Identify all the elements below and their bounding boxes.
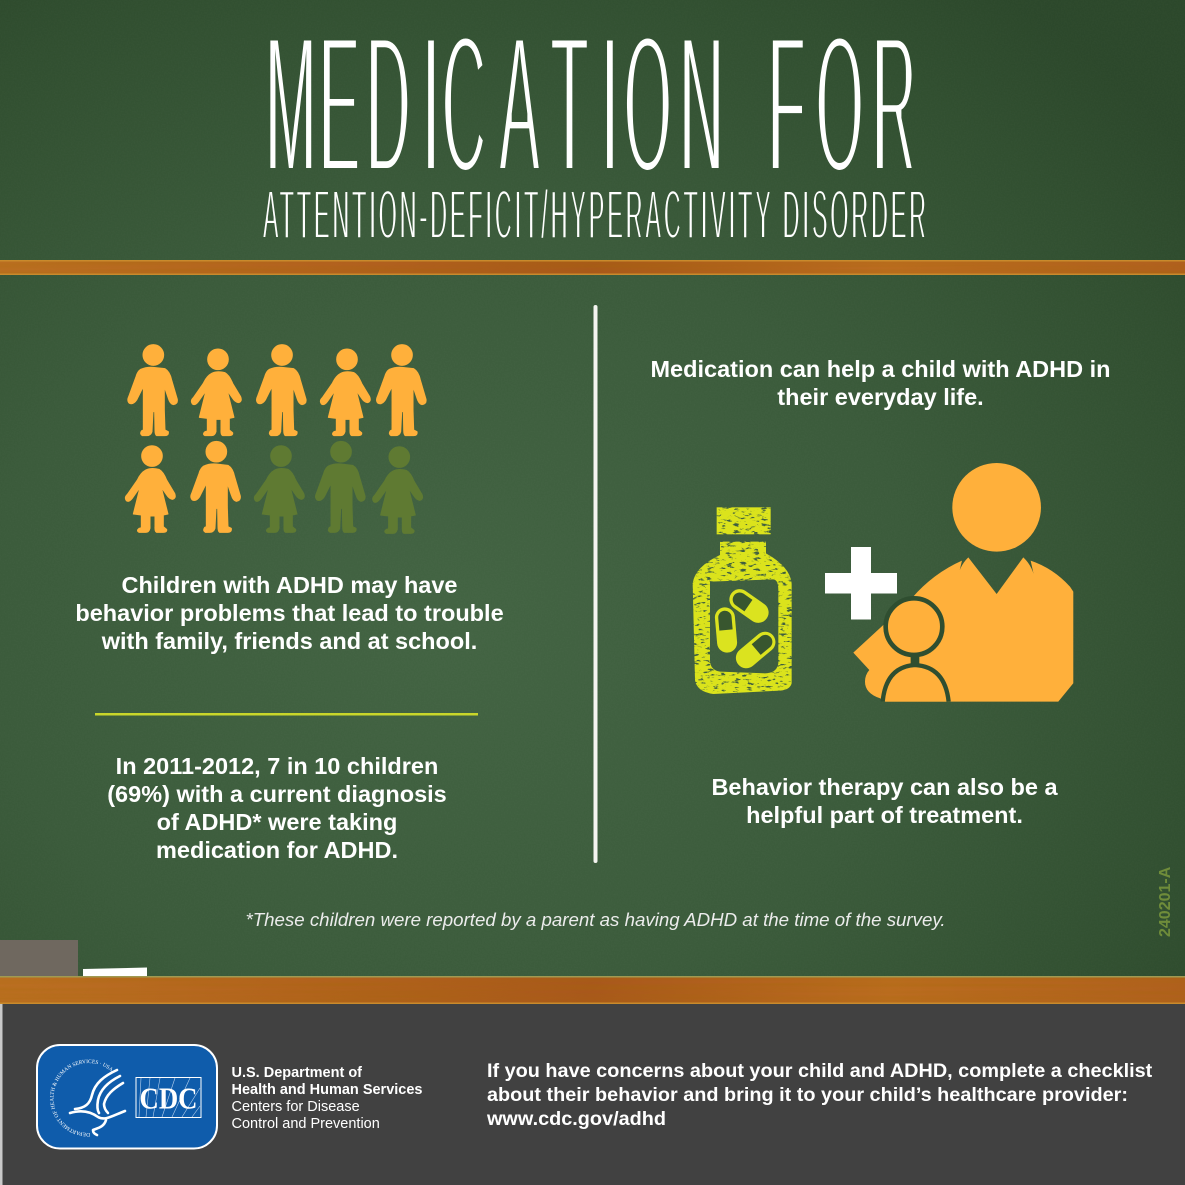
yellow divider	[95, 713, 478, 716]
child 3	[257, 345, 306, 436]
vertical chalk divider	[594, 305, 598, 863]
text: statistic: (69%) with a current diagnosis	[107, 781, 447, 807]
agency name: U.S. Department of	[232, 1065, 362, 1081]
text: behavior problems: Children with ADHD may have	[121, 572, 458, 598]
footer band	[0, 1004, 1185, 1185]
icon: adult with child	[853, 463, 1073, 702]
text: statistic: In 2011-2012, 7 in 10 children	[116, 753, 438, 779]
pill 3	[732, 627, 780, 672]
text: medication can help: their everyday life.	[777, 384, 984, 410]
icon group: ten children, seven highlighted	[125, 345, 426, 533]
child 7	[191, 441, 240, 532]
chalk stick	[83, 968, 147, 977]
subtitle: ATTENTION-DEFICIT/HYPERACTIVITY DISORDER	[263, 177, 926, 255]
text: medication can help: Medication can help a child with ADHD in	[650, 356, 1111, 382]
child 10 dimmed	[373, 447, 423, 533]
call to action: If you have concerns about your child and ADHD, complete a checklist	[487, 1060, 1153, 1082]
icon: plus sign	[825, 547, 897, 620]
text: statistic: medication for ADHD.	[156, 837, 398, 863]
text: behavior problems: with family, friends and at school.	[101, 628, 477, 654]
text: behavior problems: behavior problems that lead to trouble	[75, 600, 504, 626]
icon: pill bottle	[693, 507, 792, 694]
upper wood rail	[0, 260, 1185, 275]
child 2	[191, 349, 241, 436]
text: behavior therapy: helpful part of treatment.	[746, 802, 1023, 828]
seal ring text: DEPARTMENT OF HEALTH & HUMAN SERVICES · USA	[50, 1060, 112, 1137]
child 8 dimmed	[254, 446, 304, 532]
title: MEDICATION FOR	[265, 0, 916, 214]
agency name: Centers for Disease	[232, 1099, 360, 1115]
agency name: Control and Prevention	[232, 1116, 380, 1132]
child 6	[125, 446, 175, 532]
logo: HHS and CDC	[36, 1044, 218, 1150]
child 5	[377, 345, 426, 436]
pill 2	[714, 607, 738, 653]
footnote: *These children were reported by a parent as having ADHD at the time of the survey.	[245, 909, 946, 930]
lower wood rail	[0, 976, 1185, 1004]
pill 1	[725, 585, 773, 627]
eagle mark	[70, 1070, 125, 1135]
call to action: about their behavior and bring it to your child’s healthcare provider:	[487, 1084, 1128, 1106]
call to action: www.cdc.gov/adhd	[486, 1108, 666, 1130]
CDC box: CDC	[140, 1080, 198, 1116]
child 4	[320, 349, 370, 436]
publication code: 240201-A	[1157, 866, 1174, 937]
text: statistic: of ADHD* were taking	[157, 809, 397, 835]
child 1	[128, 345, 177, 436]
text: behavior therapy: Behavior therapy can also be a	[711, 774, 1058, 800]
eraser	[0, 940, 78, 977]
agency name: Health and Human Services	[232, 1082, 422, 1098]
child 9 dimmed	[316, 441, 365, 532]
